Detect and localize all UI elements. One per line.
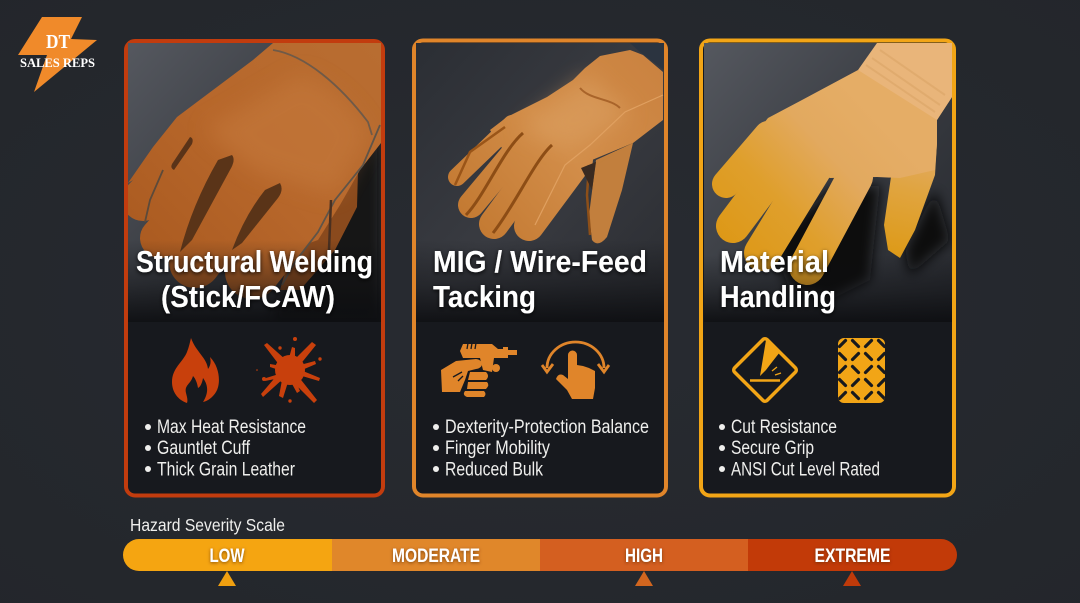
panel: structural welding — [126, 41, 383, 496]
bullet list: ANSI Cut Level Rated — [731, 460, 880, 480]
hazard severity bar: EXTREME — [814, 545, 890, 567]
marker: extreme — [843, 571, 861, 586]
heading: Handling — [720, 279, 836, 314]
bullet list: Secure Grip — [731, 438, 814, 459]
icon: molten splatter — [256, 337, 322, 403]
logo: DT Sales Reps: SALES REPS — [20, 55, 95, 70]
bullet list: Max Heat Resistance — [157, 417, 306, 438]
icon: hand holding MIG gun — [441, 343, 517, 397]
bullet list: Reduced Bulk — [445, 460, 543, 480]
heading: MIG / Wire-Feed — [433, 244, 647, 279]
heading: Material — [720, 244, 829, 279]
bullet list: Finger Mobility — [445, 438, 550, 459]
heading — [720, 244, 836, 314]
panel: MIG / wire-feed tacking — [414, 40, 666, 496]
bullet list: Thick Grain Leather — [157, 460, 296, 480]
icon: finger mobility — [542, 342, 609, 399]
bullet list: Gauntlet Cuff — [157, 438, 251, 459]
glove photo: coated knit glove — [704, 43, 952, 322]
icon: cut hazard diamond — [732, 337, 798, 403]
bullet list — [719, 417, 880, 480]
hazard severity bar: MODERATE — [392, 545, 480, 567]
bullet list — [145, 417, 306, 480]
panel: material handling — [701, 40, 954, 496]
glove photo: suede welding gauntlet — [128, 43, 381, 322]
bullet list: Dexterity-Protection Balance — [445, 417, 649, 438]
hazard severity bar — [123, 539, 957, 571]
thumb — [589, 143, 633, 243]
heading: (Stick/FCAW) — [161, 279, 335, 314]
heading: Tacking — [433, 279, 536, 314]
logo: DT Sales Reps: DT — [46, 31, 71, 53]
marker: low — [218, 571, 236, 586]
palm — [760, 70, 952, 178]
icon: diamond-plate grip — [838, 338, 885, 403]
hazard severity bar: LOW — [210, 545, 245, 567]
logo: DT Sales Reps — [18, 17, 97, 92]
heading — [433, 244, 647, 314]
hazard severity bar: HIGH — [625, 545, 663, 567]
bullet list — [433, 417, 649, 480]
thumb — [884, 143, 937, 258]
heading — [136, 244, 373, 314]
marker: high — [635, 571, 653, 586]
icon: flame — [172, 338, 219, 403]
heading: Structural Welding — [136, 244, 373, 279]
bullet list: Cut Resistance — [731, 417, 837, 438]
glove photo: smooth leather glove — [416, 43, 664, 322]
scale heading: Hazard Severity Scale — [130, 515, 285, 535]
